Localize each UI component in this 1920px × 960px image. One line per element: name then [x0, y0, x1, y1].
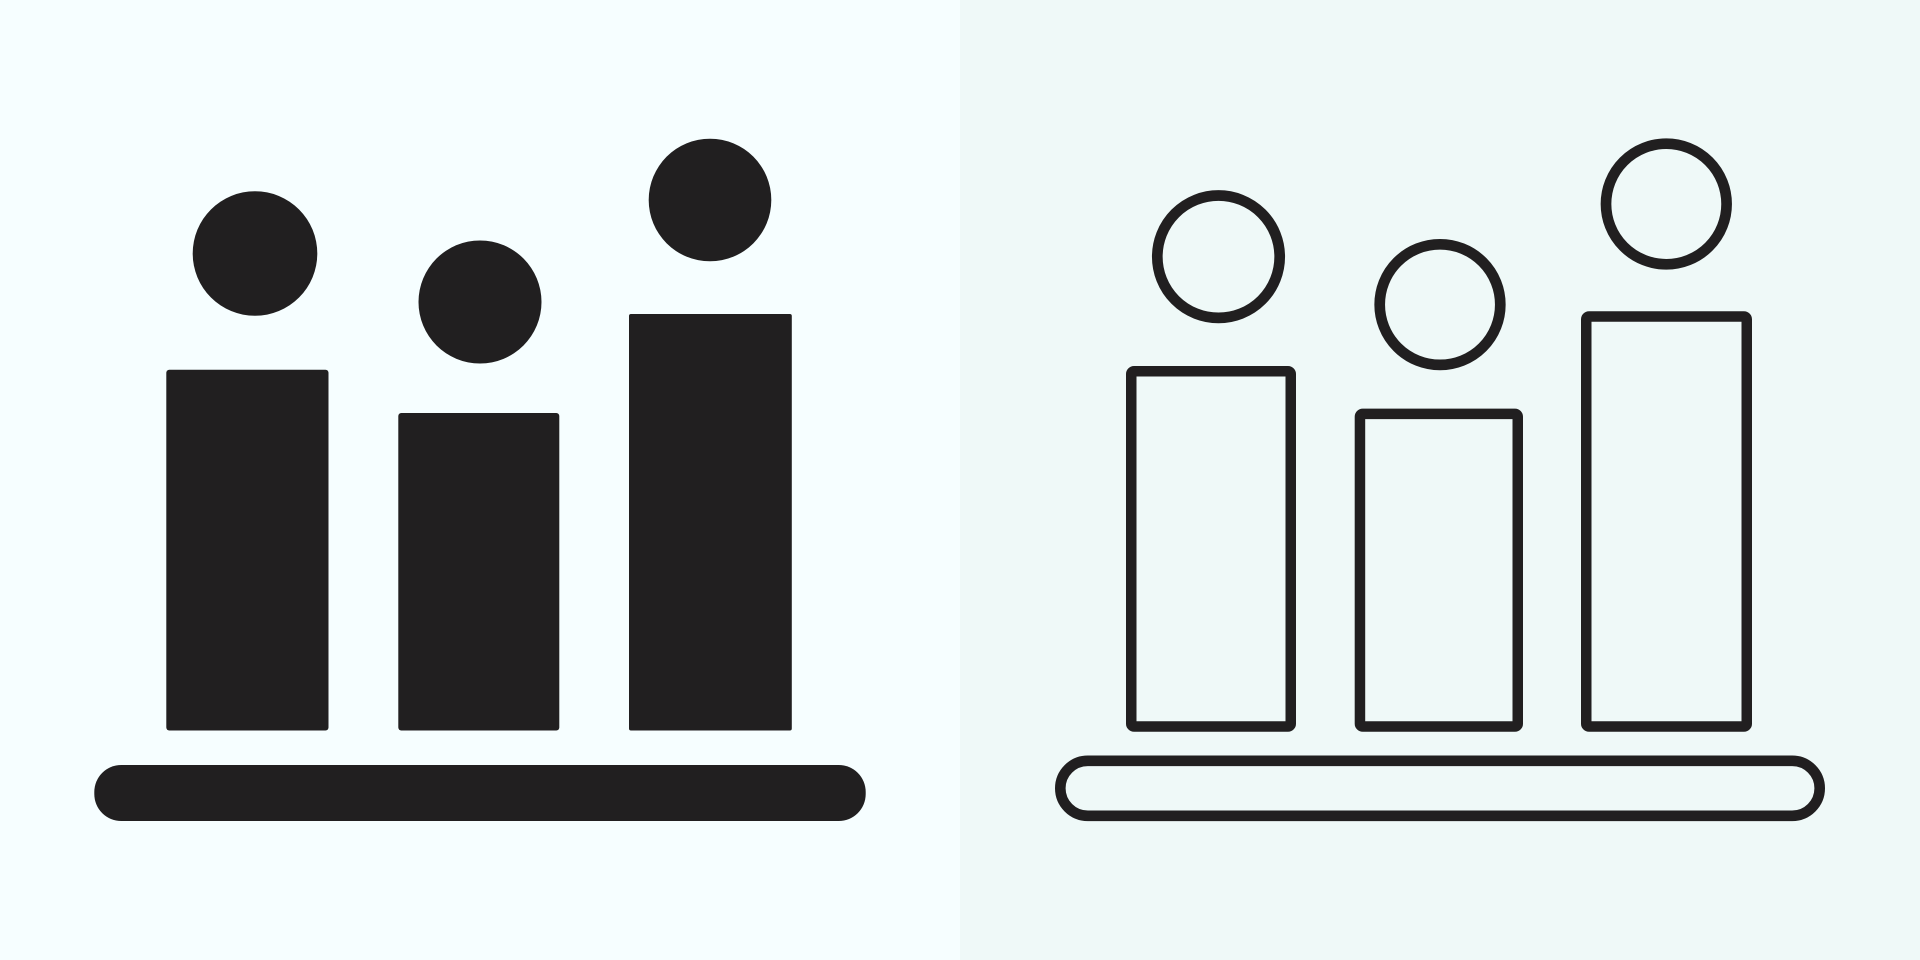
outline bar 2 [1355, 409, 1523, 732]
panel: right background [960, 0, 1920, 960]
outline head 3 [1606, 144, 1727, 264]
outline base bar [1060, 761, 1820, 816]
solid bar 1 [166, 370, 328, 730]
solid head 3 [649, 139, 771, 261]
outline head 1 [1157, 196, 1280, 318]
solid head 2 [418, 240, 542, 364]
outline bar 3 [1581, 311, 1752, 732]
solid bar 2 [398, 413, 559, 730]
solid head 1 [193, 191, 317, 316]
icon: outlined figures on podium [1060, 144, 1820, 816]
solid base bar [94, 765, 866, 821]
outline head 2 [1380, 244, 1500, 365]
panel: left background [0, 0, 960, 960]
outline bar 1 [1126, 366, 1296, 732]
solid bar 3 [629, 314, 792, 730]
icon: solid figures on podium [94, 139, 866, 821]
